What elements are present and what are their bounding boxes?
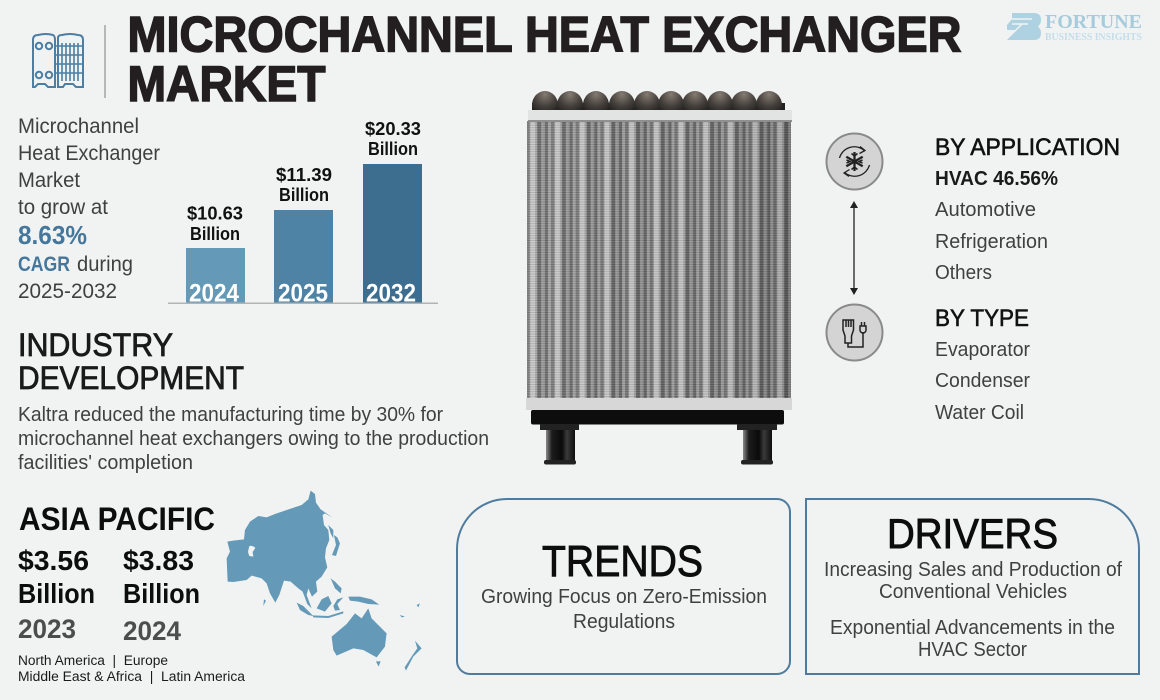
bar 2025 xyxy=(274,165,333,308)
panel: drivers: HVAC Sector xyxy=(918,639,1027,661)
segment: by type xyxy=(935,305,1030,424)
bar 2032: $20.33 xyxy=(365,119,421,139)
title: MICROCHANNEL HEAT EXCHANGER xyxy=(128,6,962,62)
bar 2024: $10.63 xyxy=(187,204,243,224)
text: industry development: Kaltra reduced the manufacturing time by 30% for xyxy=(18,404,443,426)
CAGR text block: CAGR xyxy=(18,253,70,276)
icon divider xyxy=(104,25,106,98)
CAGR text block: to grow at xyxy=(18,196,108,219)
segment: by type: Evaporator xyxy=(935,339,1030,361)
core fins xyxy=(527,121,791,399)
bar 2024 xyxy=(186,204,245,308)
stat: 2024 xyxy=(123,545,200,646)
CAGR text block: Heat Exchanger xyxy=(18,142,160,165)
stat: 2023: $3.56 xyxy=(18,545,89,576)
panel: drivers: Exponential Advancements in the xyxy=(830,617,1115,639)
heading: industry development: INDUSTRY xyxy=(18,327,173,363)
logo: Fortune Business Insights xyxy=(1007,12,1142,43)
segment: by application: HVAC 46.56% xyxy=(935,168,1058,190)
left pipe xyxy=(540,424,579,464)
CAGR text block: 2025-2032 xyxy=(18,280,117,303)
stat: 2023: 2023 xyxy=(18,614,76,644)
logo: Fortune Business Insights: BUSINESS INSIGHTS xyxy=(1045,32,1142,43)
panel: drivers xyxy=(806,499,1139,674)
segment: by application: Others xyxy=(935,262,992,284)
domes xyxy=(532,91,785,119)
CAGR text block xyxy=(18,115,160,303)
other regions: North America | Europe xyxy=(18,653,168,668)
bar 2025: Billion xyxy=(279,185,329,205)
logo: Fortune Business Insights: FORTUNE xyxy=(1045,12,1142,33)
title: MARKET xyxy=(128,56,326,112)
text: industry development xyxy=(18,404,489,474)
panel: trends: Growing Focus on Zero-Emission xyxy=(481,585,767,608)
heading: asia pacific: ASIA PACIFIC xyxy=(19,501,215,537)
other regions: Middle East & Africa | Latin America xyxy=(18,669,245,684)
base bar xyxy=(531,410,784,424)
stat: 2023: Billion xyxy=(18,578,95,609)
heading: industry development xyxy=(18,327,244,396)
segment: by type: Condenser xyxy=(935,370,1030,392)
CAGR text block: Market xyxy=(18,169,80,192)
bar 2024: Billion xyxy=(190,224,240,244)
bar 2025: 2025 xyxy=(278,280,328,308)
panel: drivers: Conventional Vehicles xyxy=(879,581,1067,603)
bar 2032 xyxy=(363,119,422,308)
text: industry development: microchannel heat exchangers owing to the production xyxy=(18,428,489,450)
title xyxy=(128,6,962,112)
CAGR text block: 8.63% xyxy=(18,220,87,250)
text: industry development: facilities' completion xyxy=(18,452,193,474)
bar 2025: $11.39 xyxy=(276,165,332,185)
segment: by application: BY APPLICATION xyxy=(935,134,1120,161)
double arrow xyxy=(850,201,858,295)
icon: snowflake cycle xyxy=(826,134,882,190)
segment: by application xyxy=(935,134,1120,284)
heading: industry development: DEVELOPMENT xyxy=(18,360,244,396)
segment: by application: Automotive xyxy=(935,199,1036,221)
map: asia pacific xyxy=(227,491,422,671)
segment: by type: BY TYPE xyxy=(935,305,1029,332)
panel: drivers: Increasing Sales and Production of xyxy=(824,559,1122,581)
icon: electric device xyxy=(826,304,882,360)
stat: 2024: $3.83 xyxy=(123,545,194,576)
stat: 2024: 2024 xyxy=(123,616,181,646)
stat: 2024: Billion xyxy=(123,578,200,609)
panel: trends: Regulations xyxy=(573,610,675,633)
other regions xyxy=(18,653,245,684)
segment: by type: Water Coil xyxy=(935,402,1024,424)
bottom plate xyxy=(526,398,792,410)
image: heat exchanger xyxy=(526,91,792,464)
bar 2032: Billion xyxy=(368,139,418,159)
bar 2032: 2032 xyxy=(366,280,416,308)
right pipe xyxy=(737,424,777,464)
CAGR text block: Microchannel xyxy=(18,115,139,138)
panel: drivers: DRIVERS xyxy=(887,510,1058,557)
panel: trends xyxy=(457,499,790,674)
stat: 2023 xyxy=(18,545,95,644)
segment: by application: Refrigeration xyxy=(935,231,1048,253)
bar chart: market size xyxy=(168,119,438,308)
top plate xyxy=(528,110,792,122)
panel: trends: TRENDS xyxy=(542,537,703,586)
bar 2024: 2024 xyxy=(189,280,239,308)
CAGR text block: during xyxy=(77,253,133,276)
icon: heat exchanger plates xyxy=(33,34,83,87)
